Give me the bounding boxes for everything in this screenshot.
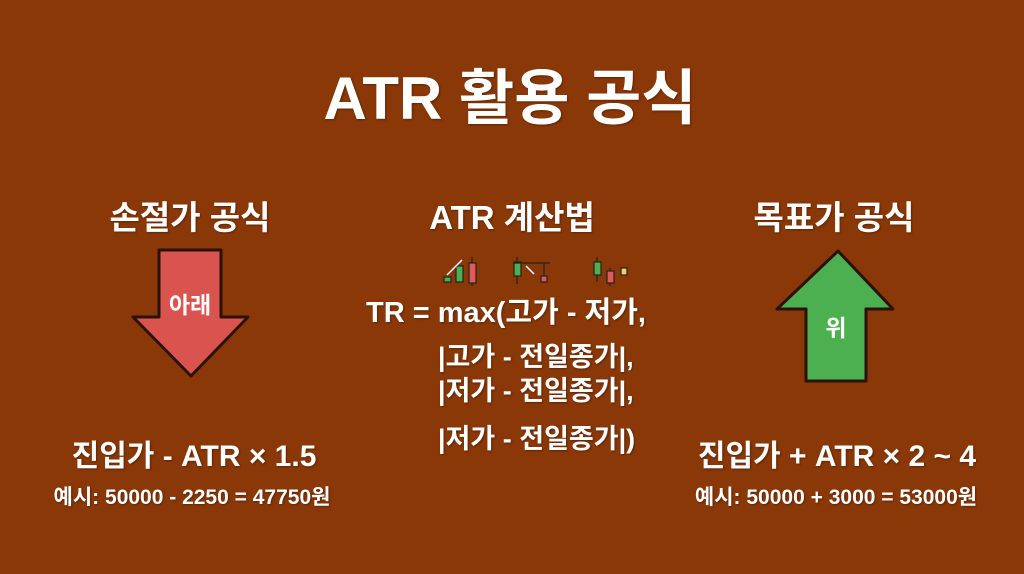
icon: candlesticks bbox=[443, 257, 628, 286]
formula: TR bbox=[366, 297, 646, 456]
text: TR = max(고가 - 저가, bbox=[366, 297, 646, 329]
text: |고가 - 전일종가|, bbox=[438, 342, 634, 372]
target example: 예시: 50000 + 3000 = 53000원 bbox=[695, 486, 977, 509]
target formula: 진입가 + ATR × 2 ~ 4 bbox=[698, 440, 976, 473]
text: |저가 - 전일종가|, bbox=[438, 376, 634, 406]
title: ATR 활용 공식 bbox=[324, 65, 696, 132]
icon: down arrow bbox=[132, 248, 250, 378]
icon: down arrow: 아래 bbox=[169, 292, 211, 318]
stop loss example: 예시: 50000 - 2250 = 47750원 bbox=[54, 486, 330, 509]
stop loss formula: 진입가 - ATR × 1.5 bbox=[72, 440, 316, 473]
heading: target: 목표가 공식 bbox=[754, 199, 914, 236]
icon: up arrow bbox=[776, 249, 894, 382]
icon: up arrow: 위 bbox=[825, 315, 847, 341]
heading: stop loss: 손절가 공식 bbox=[110, 199, 270, 236]
text: |저가 - 전일종가|) bbox=[438, 424, 635, 454]
heading: ATR calc: ATR 계산법 bbox=[429, 199, 595, 236]
